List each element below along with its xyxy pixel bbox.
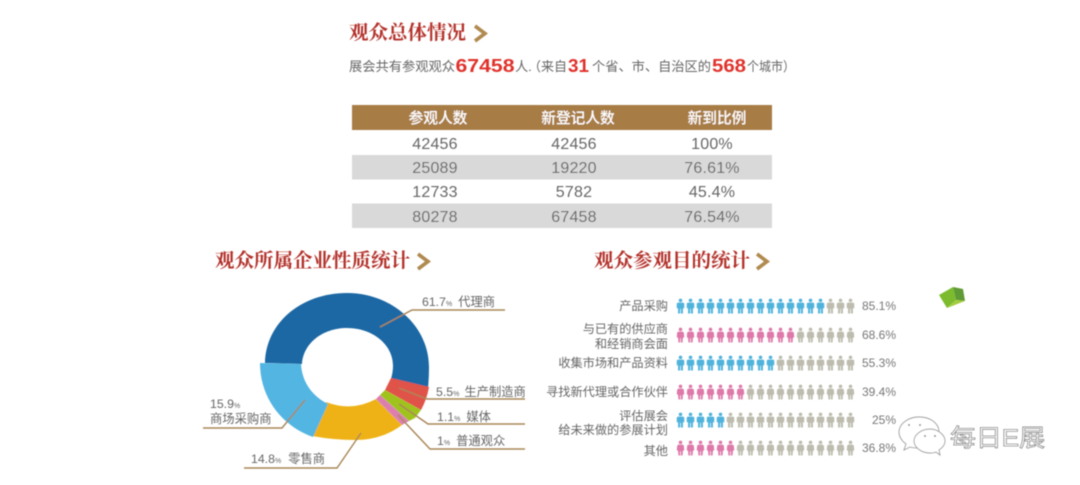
- summary sentence: 个城市）: [747, 58, 795, 74]
- row: collecting market and product data: 55.3%: [862, 356, 896, 370]
- donut chart: company type: [260, 293, 429, 440]
- table: audience numbers: 100%: [691, 136, 733, 153]
- label: agents: [380, 294, 505, 327]
- table: audience numbers: 76.61%: [684, 160, 740, 177]
- segment: general visitors 1%: [376, 395, 409, 425]
- table: audience numbers: 42456: [551, 136, 597, 153]
- segment: mall buyers 15.9%: [260, 363, 328, 437]
- label: media: 1.1% 媒体: [437, 410, 491, 424]
- label: mall buyers: 商场采购商: [210, 411, 272, 426]
- row: evaluating the fair for future plans: 给未来做的参展计划: [558, 422, 668, 437]
- summary sentence: （来自: [528, 59, 567, 74]
- row: product purchasing: 85.1%: [862, 299, 896, 313]
- row: evaluating the fair for future plans: [558, 409, 896, 437]
- summary sentence: 展会共有参观观众: [349, 58, 455, 74]
- table: audience numbers: 12733: [412, 184, 458, 201]
- label: manufacturers: 5.5% 生产制造商: [436, 384, 526, 399]
- row: evaluating the fair for future plans: 评估展会: [619, 409, 668, 423]
- table: audience numbers: 67458: [551, 209, 597, 226]
- table: audience numbers: 19220: [551, 160, 597, 177]
- row: evaluating the fair for future plans: 25%: [872, 413, 896, 427]
- watermark text: 每日E展: [950, 425, 1045, 452]
- label: media: [399, 404, 525, 424]
- row: finding new agents or partners: 寻找新代理或合作伙伴: [546, 384, 668, 399]
- summary sentence: 人.: [515, 59, 532, 74]
- table: audience numbers: 新到比例: [688, 110, 746, 127]
- table: audience numbers: 42456: [412, 136, 458, 153]
- icon: WeChat logo: [899, 417, 945, 455]
- title: overall audience: 观众总体情况: [349, 22, 467, 44]
- title: company type: 观众所属企业性质统计: [215, 249, 411, 272]
- icon: title chevron: [475, 26, 485, 41]
- table: audience numbers: 新登记人数: [541, 110, 615, 127]
- row: collecting market and product data: [558, 355, 896, 370]
- row: product purchasing: 产品采购: [619, 298, 668, 313]
- row: product purchasing: [619, 298, 896, 314]
- table: audience numbers: 76.54%: [684, 209, 740, 226]
- row: collecting market and product data: 收集市场和产品资料: [558, 355, 668, 370]
- label: manufacturers: [399, 384, 526, 399]
- table: audience numbers: 80278: [412, 209, 458, 226]
- table: audience numbers: [352, 105, 772, 228]
- table: audience numbers: 5782: [556, 184, 592, 201]
- table: audience numbers: 参观人数: [409, 109, 468, 127]
- segment: retailers 14.8%: [312, 399, 402, 440]
- icon: title chevron: [757, 254, 767, 269]
- segment: media 1.1%: [380, 390, 421, 421]
- icon: green cube: [939, 287, 965, 308]
- row: meeting suppliers and distributors: [583, 321, 896, 351]
- label: general visitors: 1% 普通观众: [437, 434, 505, 448]
- row: meeting suppliers and distributors: 68.6%: [862, 328, 896, 342]
- label: general visitors: [398, 415, 525, 449]
- row: finding new agents or partners: [546, 384, 896, 400]
- row: meeting suppliers and distributors: 与已有的供应商: [583, 321, 668, 336]
- summary sentence: 个省、市、自治区的: [592, 58, 711, 74]
- row: other: 其他: [644, 444, 668, 458]
- summary sentence: 568: [712, 56, 746, 76]
- summary sentence: [349, 56, 795, 76]
- table: audience numbers: 25089: [412, 160, 458, 177]
- table: audience numbers: 45.4%: [689, 184, 735, 201]
- icon: title chevron: [418, 254, 428, 269]
- summary sentence: 31: [568, 56, 589, 76]
- label: retailers: [244, 433, 361, 468]
- label: mall buyers: 15.9%: [210, 397, 240, 411]
- summary sentence: 67458: [456, 56, 514, 76]
- row: other: [644, 441, 896, 458]
- title: visit purpose: 观众参观目的统计: [594, 250, 751, 272]
- row: other: 36.8%: [862, 441, 896, 455]
- label: retailers: 14.8% 零售商: [251, 451, 325, 466]
- label: agents: 61.7% 代理商: [422, 294, 495, 309]
- label: mall buyers: [203, 397, 305, 428]
- segment: agents 61.7%: [265, 293, 429, 388]
- segment: manufacturers 5.5%: [385, 378, 429, 410]
- row: finding new agents or partners: 39.4%: [862, 385, 896, 399]
- row: meeting suppliers and distributors: 和经销商会面: [595, 336, 668, 351]
